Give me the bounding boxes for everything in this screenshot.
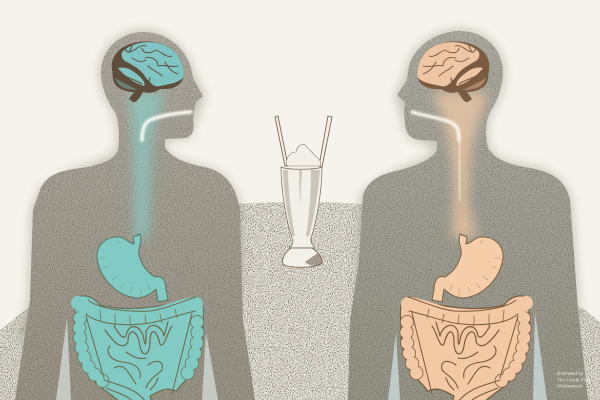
arm gap left inner xyxy=(56,318,71,400)
arm gap right inner xyxy=(533,312,547,400)
esophagus lower highlight xyxy=(459,135,460,200)
esophagus lower highlight xyxy=(141,135,143,182)
silhouette right xyxy=(348,31,588,400)
glass xyxy=(281,167,322,248)
body glow left xyxy=(20,30,242,340)
arm gap right inner xyxy=(202,332,218,400)
brain left xyxy=(112,41,184,102)
intestines left xyxy=(74,296,204,400)
silhouette left xyxy=(15,32,255,400)
arm gap left inner xyxy=(388,332,400,400)
speckled backdrop behind figures xyxy=(0,200,600,400)
glass shading xyxy=(283,170,320,236)
esophagus highlight xyxy=(412,112,459,140)
straw right xyxy=(319,116,332,167)
icon: milkshake xyxy=(275,116,332,267)
teal glow along throat xyxy=(128,92,166,240)
straw left xyxy=(275,116,288,166)
illustration credit: Illustrated by xyxy=(557,371,584,376)
glass base xyxy=(283,248,322,267)
figure: right person xyxy=(348,24,588,400)
peach glow along throat xyxy=(432,92,488,238)
intestines right xyxy=(400,296,530,400)
figure: left person xyxy=(15,26,255,400)
esophagus highlight xyxy=(142,112,191,140)
body glow right xyxy=(358,29,580,320)
brain right xyxy=(417,41,489,102)
illustration credit: The Fourth Floor xyxy=(557,377,592,382)
illustration credit: Shutterstock xyxy=(557,384,583,389)
body grain left xyxy=(15,32,255,400)
stomach left xyxy=(97,234,168,302)
base shadow xyxy=(305,253,322,266)
body grain right xyxy=(348,31,588,400)
stomach right xyxy=(432,234,503,302)
whipped cream xyxy=(287,144,321,166)
